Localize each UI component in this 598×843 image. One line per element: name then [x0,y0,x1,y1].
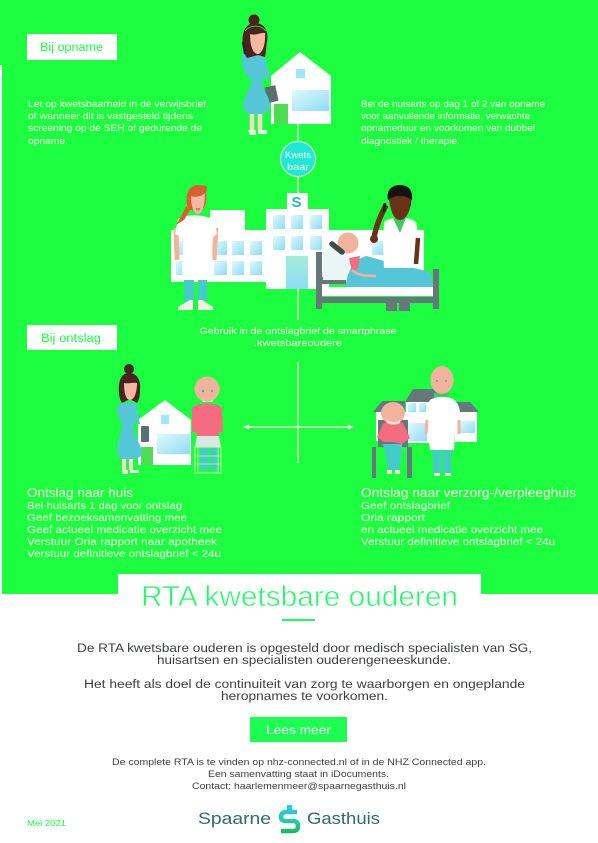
text block: right admission: voor aanvullende informatie, verwachte [361,111,530,122]
badge: Kwetsbaar: Kwets [285,150,312,160]
icon: woman, house and elderly man [117,364,223,474]
logo: Spaarne Gasthuis: Spaarne [198,809,271,828]
icon: care home with patient in wheelchair and doctor [372,366,479,478]
text block: right admission: Bel de huisarts op dag 1 of 2 van opname [361,99,545,110]
button: Lees meer: Lees meer [266,723,331,737]
logo: Spaarne Gasthuis: Gasthuis [307,809,380,828]
text block: Ontslag naar huis: Bel huisarts 1 dag voor ontslag [27,500,182,512]
badge: Kwetsbaar [280,142,316,176]
text block: footer info: De complete RTA is te vinden op nhz-connected.nl of in de NHZ Connected app. [112,757,486,768]
date: Mei 2021 [27,818,66,828]
callout: smartphrase text: Gebruik in de ontslagbrief de smartphrase [200,326,396,337]
heading: Bij ontslag [27,325,117,350]
button: Lees meer [250,717,347,742]
callout: smartphrase text: .kwetsbareoudere [254,338,342,349]
text block: footer info: Contact: haarlemenmeer@spaarnegasthuis.nl [192,781,406,792]
text block: Ontslag naar verzorg-/verpleeghuis: Ontslag naar verzorg-/verpleeghuis [361,486,576,500]
text block: footer info [112,757,486,792]
text block: Ontslag naar huis: Geef actueel medicatie overzicht mee [27,524,222,536]
icon: hospital: S [291,194,302,211]
heading: Bij ontslag: Bij ontslag [41,333,101,345]
icon: doctor with phone [370,185,419,311]
text block: right admission: diagnostiek / therapie. [361,136,460,147]
text block: Ontslag naar verzorg-/verpleeghuis: en actueel medicatie overzicht mee [361,524,543,536]
text block: Ontslag naar huis: Verstuur Oria rapport naar apotheek [27,536,218,548]
title: RTA kwetsbare ouderen [141,581,458,613]
text block: left admission: screening op de SEH of gedurende de [28,123,202,134]
text block: Ontslag naar huis: Ontslag naar huis [27,486,133,500]
text block: right admission: opnameduur en voorkomen van dubbel [361,123,535,134]
icon: hospital bed with patient [316,232,439,309]
text block: Ontslag naar huis [27,486,222,560]
text block: introduction: huisartsen en specialisten ouderengeneeskunde. [157,653,451,667]
icon: hospital [171,193,424,289]
icon: house top [271,52,331,124]
badge: Kwetsbaar: baar [287,162,309,172]
icon: nurse [175,185,217,310]
text block: left admission: opname. [28,136,68,147]
text block: introduction: Het heeft als doel de continuiteit van zorg te waarborgen en ongeplande [84,677,525,691]
text block: left admission [28,99,209,147]
text block: introduction: De RTA kwetsbare ouderen is opgesteld door medisch specialisten van SG, [77,641,532,655]
heading: Bij opname: Bij opname [40,42,103,54]
text block: Ontslag naar huis: Verstuur definitieve ontslagbrief < 24u [27,548,221,560]
text block: left admission: Let op kwetsbaarheid in de verwijsbrief, [28,99,209,110]
text block: Ontslag naar verzorg-/verpleeghuis: Verstuur definitieve ontslagbrief < 24u [361,536,555,548]
text block: footer info: Een samenvatting staat in iDocuments. [208,769,389,780]
text block: Ontslag naar verzorg-/verpleeghuis: Oria rapport [361,512,425,524]
text block: Ontslag naar verzorg-/verpleeghuis: Geef ontslagbrief [361,500,450,512]
logo: Spaarne Gasthuis [198,805,380,831]
connector lines [297,124,299,463]
text block: introduction [77,641,532,703]
icon: woman with phone top [242,14,279,135]
text block: right admission [361,99,545,147]
text block: left admission: of wanneer dit is vastgesteld tijdens [28,111,193,122]
heading: Bij opname [27,34,117,60]
callout: smartphrase text [200,326,396,349]
text block: Ontslag naar huis: Geef bezoeksamenvatting mee [27,512,187,524]
text block: introduction: heropnames te voorkomen. [221,689,388,703]
green background panel [0,0,598,594]
arrow: two-way horizontal [243,424,354,430]
text block: Ontslag naar verzorg-/verpleeghuis [361,486,576,548]
